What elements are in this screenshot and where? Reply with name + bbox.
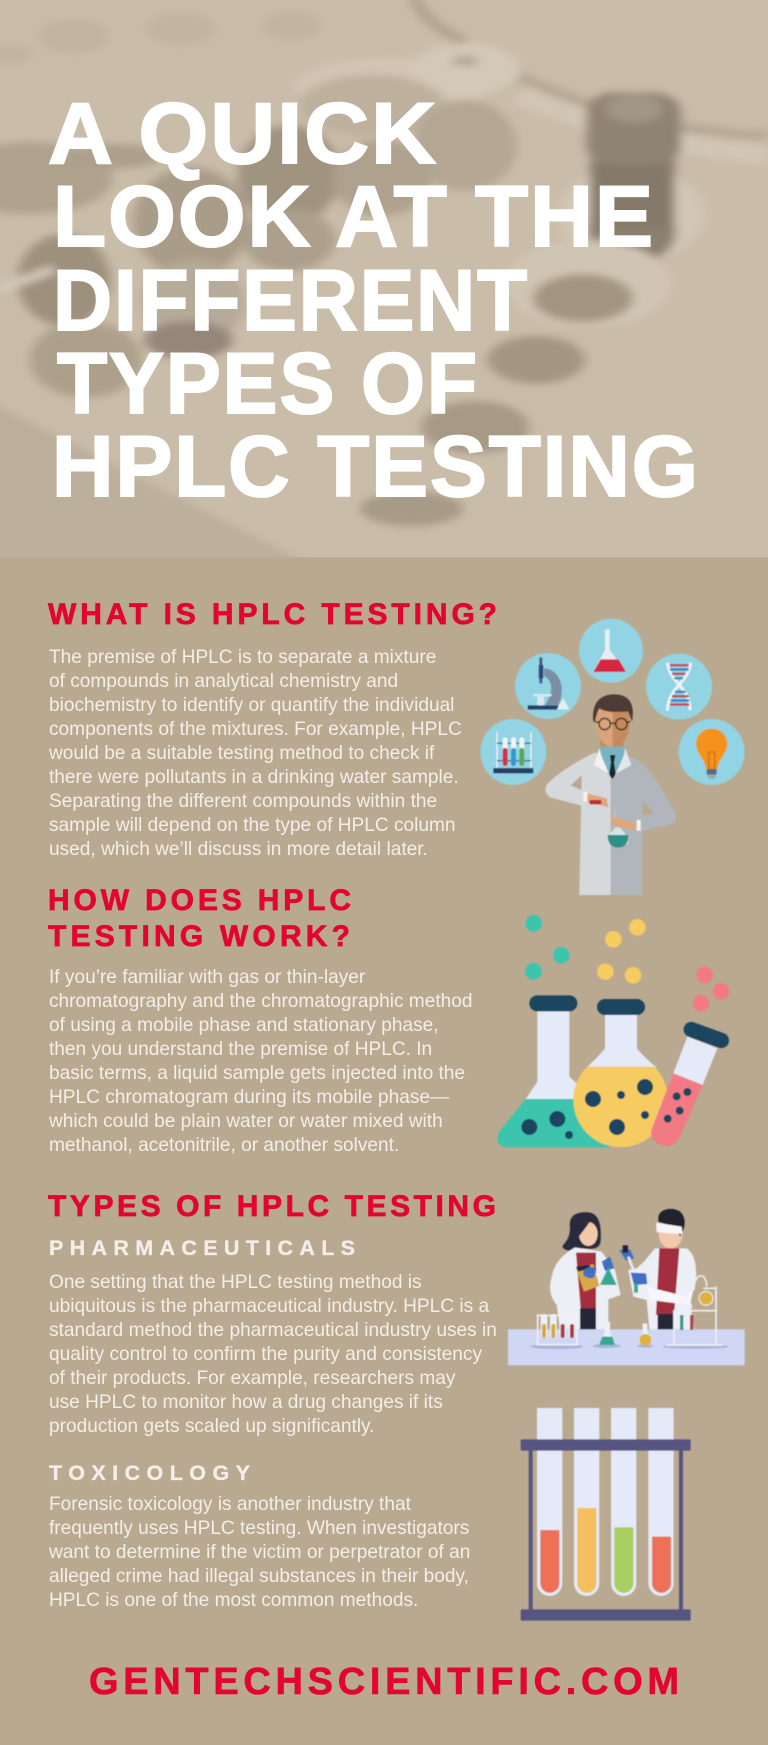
title: [48, 86, 700, 515]
hero photo background: [0, 0, 768, 582]
text block: pharmaceuticals: ubiquitous is the pharmaceutical industry. HPLC is a: [49, 1296, 489, 1317]
tube 1: [537, 1408, 562, 1596]
text block: how hplc works: then you understand the premise of HPLC. In: [49, 1039, 432, 1060]
text block: how hplc works: [48, 967, 472, 1156]
icon: test tube rack: [480, 719, 546, 785]
illustration: scientist with icons: [480, 619, 745, 895]
text block: toxicology: want to determine if the victim or perpetrator of an: [48, 1542, 470, 1563]
text block: how hplc works: which could be plain water or water mixed with: [48, 1111, 443, 1132]
text block: pharmaceuticals: One setting that the HPLC testing method is: [49, 1272, 422, 1293]
subheading: toxicology: TOXICOLOGY: [49, 1461, 250, 1485]
text block: what is hplc: sample will depend on the type of HPLC column: [49, 815, 456, 836]
footer website: GENTECHSCIENTIFIC.COM: [89, 1661, 679, 1703]
text block: how hplc works: If you’re familiar with gas or thin-layer: [49, 967, 366, 988]
heading: how does hplc testing work: HOW DOES HPLC: [48, 884, 351, 917]
text block: what is hplc: The premise of HPLC is to separate a mixture: [49, 647, 436, 668]
title: DIFFERENT: [53, 253, 529, 349]
text block: pharmaceuticals: of their products. For example, researchers may: [49, 1368, 456, 1389]
heading: how does hplc testing work: [48, 884, 351, 953]
text block: toxicology: [48, 1494, 470, 1611]
subheading: pharmaceuticals: PHARMACEUTICALS: [49, 1236, 355, 1260]
man scientist: [619, 1209, 696, 1330]
text block: pharmaceuticals: [49, 1272, 497, 1437]
text block: how hplc works: HPLC chromatogram during its mobile phase—: [49, 1087, 450, 1108]
text block: what is hplc: would be a suitable testing method to check if: [48, 743, 435, 764]
tube 2: [574, 1408, 599, 1596]
text block: what is hplc: of compounds in analytical chemistry and: [49, 671, 398, 692]
icon: dna helix: [646, 654, 712, 720]
illustration: flasks and bubbles: [497, 915, 731, 1147]
text block: how hplc works: of using a mobile phase and stationary phase,: [49, 1015, 439, 1036]
icon: light bulb: [679, 719, 745, 785]
text block: pharmaceuticals: production gets scaled up significantly.: [49, 1416, 374, 1437]
text block: toxicology: alleged crime had illegal substances in their body,: [49, 1566, 469, 1587]
text block: toxicology: HPLC is one of the most common methods.: [49, 1590, 418, 1611]
text block: pharmaceuticals: quality control to confirm the purity and consistency: [49, 1344, 482, 1365]
woman scientist: [550, 1212, 621, 1330]
heading: how does hplc testing work: TESTING WORK?: [48, 920, 350, 953]
text block: how hplc works: chromatography and the chromatographic method: [49, 991, 472, 1012]
tube 4: [648, 1408, 674, 1596]
text block: how hplc works: basic terms, a liquid sample gets injected into the: [49, 1063, 465, 1084]
tube 3: [611, 1408, 636, 1596]
text block: what is hplc: biochemistry to identify or quantify the individual: [49, 695, 454, 716]
title: TYPES OF: [57, 336, 479, 432]
text block: what is hplc: [48, 647, 462, 860]
icon: erlenmeyer flask: [579, 619, 643, 683]
text block: what is hplc: used, which we’ll discuss in more detail later.: [49, 839, 428, 860]
bubbles: [525, 915, 729, 1011]
text block: what is hplc: components of the mixtures. For example, HPLC: [49, 719, 462, 740]
illustration: test tube rack: [521, 1408, 691, 1621]
text block: how hplc works: methanol, acetonitrile, or another solvent.: [49, 1135, 399, 1156]
text block: pharmaceuticals: use HPLC to monitor how a drug changes if its: [49, 1392, 443, 1413]
text block: what is hplc: there were pollutants in a drinking water sample.: [49, 767, 459, 788]
heading: what is hplc testing: WHAT IS HPLC TESTING?: [48, 598, 497, 631]
text block: toxicology: Forensic toxicology is another industry that: [49, 1494, 412, 1515]
heading: types of hplc testing: TYPES OF HPLC TESTING: [48, 1190, 496, 1223]
round flask: [573, 999, 668, 1147]
text block: toxicology: frequently uses HPLC testing. When investigators: [49, 1518, 469, 1539]
text block: what is hplc: Separating the different compounds within the: [49, 791, 437, 812]
title: LOOK AT THE: [53, 169, 655, 265]
conical flask: [497, 995, 610, 1147]
scientist figure: [545, 694, 676, 895]
title: HPLC TESTING: [52, 419, 700, 515]
icon: microscope: [515, 653, 581, 719]
test tube: [651, 1020, 731, 1146]
title: A QUICK: [48, 86, 438, 182]
text block: pharmaceuticals: standard method the pharmaceutical industry uses in: [49, 1320, 497, 1341]
illustration: two lab scientists at bench: [508, 1209, 745, 1365]
bench with glassware: [508, 1276, 745, 1365]
